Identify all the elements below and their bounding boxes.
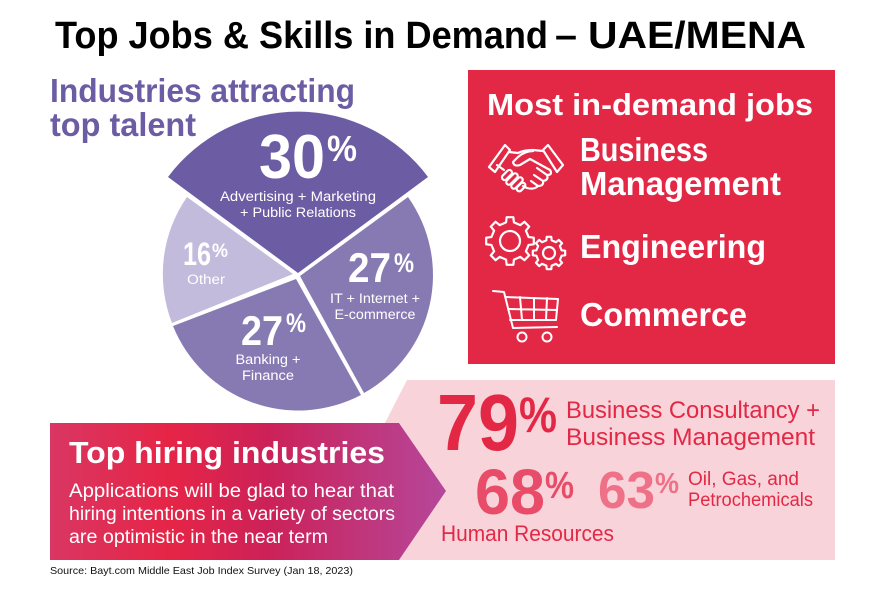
panel: hiring percentages [385,378,835,560]
pie chart: industries [163,112,433,410]
text: description: Applications will be glad to hear that [69,481,395,502]
label: oil and gas [688,469,813,511]
panel: most in-demand jobs [468,70,835,364]
title: – [555,15,577,57]
label: business management: Business [580,131,708,168]
slice: advertising 30%: % [327,128,357,169]
stat: 79%: % [519,387,557,443]
slice: banking 27%: 27 [241,307,283,354]
stat: 63%: % [655,468,679,500]
label: business consultancy [566,397,820,451]
title: Top Jobs & Skills in Demand [55,15,548,57]
slice: banking 27% [173,279,361,410]
text: description: are optimistic in the near term [69,527,328,548]
label: business consultancy: Business Management [566,424,815,451]
title: UAE/MENA [588,15,806,57]
slice: other 16% [163,197,293,323]
slice: other 16%: Other [187,272,226,287]
title [55,15,806,57]
text: description: hiring intentions in a variety of sectors [69,504,395,525]
slice: advertising 30%: 30 [259,123,325,192]
label: business consultancy: Business Consultancy + [566,397,820,424]
slice: IT 27%: % [394,248,414,278]
slice: other 16%: 16 [183,236,211,272]
label: business management: Management [580,165,781,202]
icon: handshake [489,145,563,192]
heading: industries attracting top talent: top talent [50,106,196,143]
source note: Source: Bayt.com Middle East Job Index Survey (Jan 18, 2023) [50,565,353,577]
heading: top hiring industries: Top hiring industries [69,435,385,470]
arrow panel: top hiring industries [50,423,446,560]
slice: IT 27% [300,197,433,393]
slice: IT 27%: IT + Internet + [330,291,420,306]
heading: most in-demand jobs: Most in-demand jobs [487,87,813,122]
slice: advertising 30% [168,112,428,273]
icon: shopping cart [493,291,558,342]
slice: advertising 30%: + Public Relations [240,205,356,220]
heading: industries attracting top talent [50,72,355,143]
label: oil and gas: Oil, Gas, and [688,469,799,490]
stat: 68%: % [545,465,574,507]
stat: 79%: 79 [437,378,519,467]
label: oil and gas: Petrochemicals [688,490,813,511]
label: business management [580,131,781,202]
slice: IT 27%: 27 [348,244,391,291]
heading: industries attracting top talent: Industries attracting [50,72,355,109]
slice: banking 27%: % [286,308,306,338]
slice: banking 27%: Finance [242,368,294,383]
stat: 63%: 63 [598,462,655,520]
slice: IT 27%: E-commerce [334,307,416,322]
label: engineering: Engineering [580,228,766,265]
slice: advertising 30%: Advertising + Marketing [220,189,376,204]
stat: 68%: 68 [475,456,545,528]
text: description [69,481,395,548]
label: human resources: Human Resources [441,521,614,546]
label: commerce: Commerce [580,296,747,333]
slice: banking 27%: Banking + [236,352,301,367]
slice: other 16%: % [212,241,228,262]
icon: gears [486,217,565,269]
